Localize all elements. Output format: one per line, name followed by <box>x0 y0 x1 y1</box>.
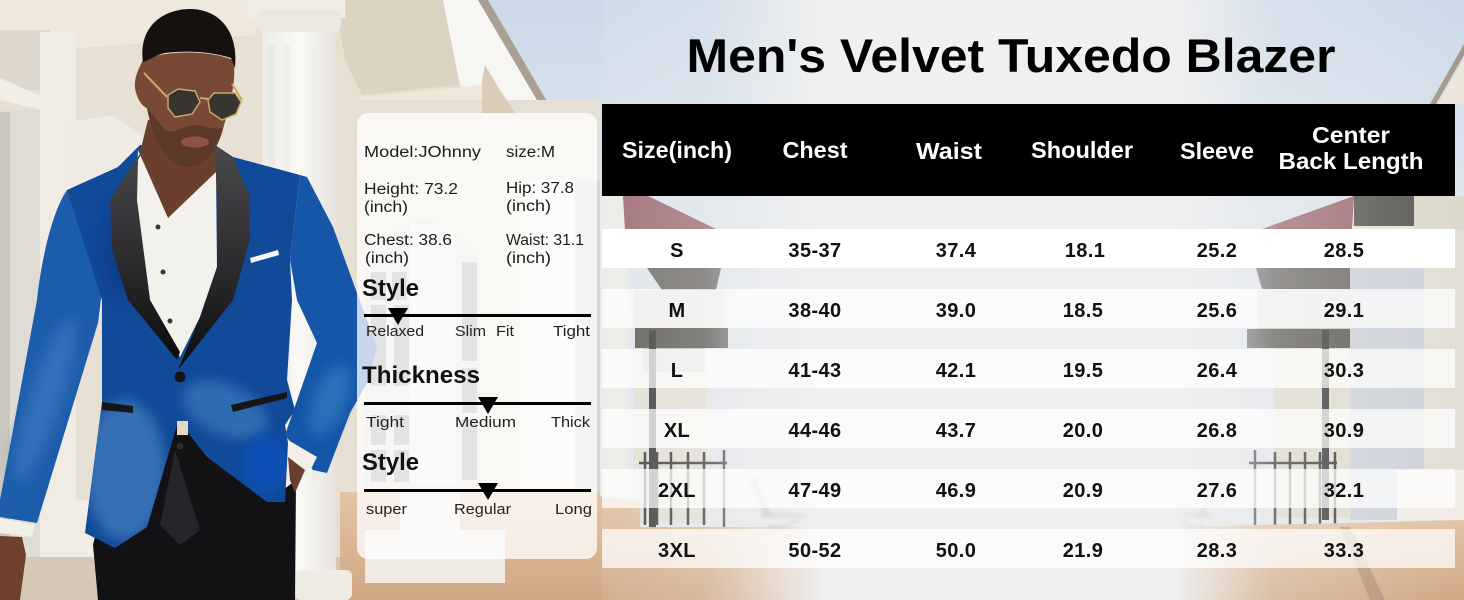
left building <box>0 0 490 600</box>
blazer torso <box>67 145 300 548</box>
model measurements <box>364 144 584 267</box>
row: L <box>602 349 1455 388</box>
trousers <box>93 420 296 600</box>
row: L: 42.1 <box>936 360 976 382</box>
welt pocket, right <box>231 392 287 412</box>
panel: model details and fit scales <box>357 113 597 559</box>
welt pocket, left <box>102 402 133 413</box>
mirrored scene, right <box>1262 196 1354 230</box>
row: M: 39.0 <box>936 300 976 322</box>
row: 2XL: 20.9 <box>1063 480 1103 502</box>
row: L: 19.5 <box>1063 360 1103 382</box>
row: XL: XL <box>664 420 690 442</box>
row: S <box>602 229 1455 268</box>
scale: style fit: Slim <box>455 324 486 340</box>
roof corner top right <box>1430 44 1464 104</box>
table header: Center <box>1312 122 1390 148</box>
table header: Waist <box>916 138 982 164</box>
scale: style fit <box>362 275 591 340</box>
row: M <box>602 289 1455 328</box>
shirt <box>136 150 217 357</box>
model measurements: Model:JOhnny <box>364 144 481 161</box>
row: S: 18.1 <box>1065 240 1105 262</box>
row: M: 25.6 <box>1197 300 1237 322</box>
jacket button <box>174 372 186 382</box>
model measurements: (inch) <box>506 198 551 215</box>
white wash over table area <box>602 0 1464 600</box>
blazer left sleeve <box>0 190 102 523</box>
scale: style length: Regular <box>454 502 511 518</box>
row: XL: 44-46 <box>788 420 842 442</box>
scale: style length <box>362 449 592 518</box>
model measurements: Waist: 31.1 <box>506 232 584 249</box>
row: M: 29.1 <box>1324 300 1364 322</box>
shirt buttons <box>156 224 172 324</box>
floor <box>0 557 340 600</box>
row: 3XL: 50.0 <box>936 540 976 562</box>
hair <box>142 9 235 68</box>
row: 2XL: 2XL <box>658 480 696 502</box>
row: 2XL: 47-49 <box>788 480 842 502</box>
table header <box>602 104 1455 196</box>
main column <box>262 30 336 575</box>
scale: style length: Style <box>362 449 419 476</box>
lower shirt hem <box>177 421 188 435</box>
scale: thickness <box>362 362 591 431</box>
arched window behind panel <box>365 220 480 490</box>
trouser button <box>176 442 184 450</box>
row: 3XL: 28.3 <box>1197 540 1237 562</box>
head <box>135 52 234 167</box>
scale: thickness: Tight <box>366 415 404 431</box>
model measurements: Chest: 38.6 <box>364 232 452 249</box>
sunglasses <box>144 73 242 120</box>
beard shading <box>147 108 222 167</box>
table header: Sleeve <box>1180 138 1254 164</box>
row: S: 37.4 <box>936 240 977 262</box>
scale: style length: super <box>366 502 407 518</box>
row: 2XL: 32.1 <box>1324 480 1364 502</box>
shawl lapel, right <box>178 145 250 370</box>
mouth <box>181 136 209 148</box>
model measurements: (inch) <box>506 250 551 267</box>
row: XL: 26.8 <box>1197 420 1237 442</box>
row: S: 35-37 <box>788 240 842 262</box>
row: S: S <box>670 240 684 262</box>
scale: style fit: Style <box>362 275 419 302</box>
row: M: 18.5 <box>1063 300 1103 322</box>
right side of left building <box>335 0 460 95</box>
row: 3XL: 21.9 <box>1063 540 1103 562</box>
row: S: 25.2 <box>1197 240 1237 262</box>
cuff and hand, left <box>0 518 35 537</box>
table header: Shoulder <box>1031 137 1133 163</box>
row: XL: 20.0 <box>1063 420 1103 442</box>
model measurements: Hip: 37.8 <box>506 180 574 197</box>
model measurements: Height: 73.2 <box>364 181 458 198</box>
row: 2XL: 46.9 <box>936 480 976 502</box>
row: L: 30.3 <box>1324 360 1364 382</box>
title: Men's Velvet Tuxedo Blazer <box>686 29 1336 82</box>
scale: style fit: Tight <box>553 324 590 340</box>
blazer right arm <box>285 175 377 473</box>
row: L: L <box>671 360 683 382</box>
model measurements: size:M <box>506 144 555 161</box>
scale: style fit: Relaxed <box>366 324 424 340</box>
row: XL <box>602 409 1455 448</box>
neck <box>138 120 217 218</box>
row: 3XL: 33.3 <box>1324 540 1364 562</box>
size table <box>602 104 1455 568</box>
row: XL: 43.7 <box>936 420 976 442</box>
mirrored scene, left <box>600 196 628 496</box>
row: 2XL <box>602 469 1455 508</box>
shawl lapel, left <box>110 143 180 360</box>
pocket square <box>250 250 279 263</box>
model measurements: (inch) <box>365 250 409 267</box>
scale: thickness: Thick <box>551 415 591 431</box>
table header: Size(inch) <box>622 137 732 163</box>
row: 3XL <box>602 529 1455 568</box>
cuff and hand, right <box>288 440 317 477</box>
row: 3XL: 3XL <box>658 540 696 562</box>
row: S: 28.5 <box>1324 240 1364 262</box>
table header: Chest <box>782 137 848 163</box>
row: M: 38-40 <box>788 300 842 322</box>
scale: style length: Long <box>555 502 592 518</box>
row: 2XL: 27.6 <box>1197 480 1237 502</box>
scale: thickness: Thickness <box>362 362 480 389</box>
row: L: 26.4 <box>1197 360 1238 382</box>
scale: style fit: Fit <box>496 324 514 340</box>
table header: Back Length <box>1278 148 1424 174</box>
row: 3XL: 50-52 <box>788 540 842 562</box>
model photo <box>0 9 377 600</box>
row: XL: 30.9 <box>1324 420 1364 442</box>
scale: thickness: Medium <box>455 415 516 431</box>
row: M: M <box>668 300 686 322</box>
model measurements: (inch) <box>364 199 408 216</box>
row: L: 41-43 <box>788 360 842 382</box>
